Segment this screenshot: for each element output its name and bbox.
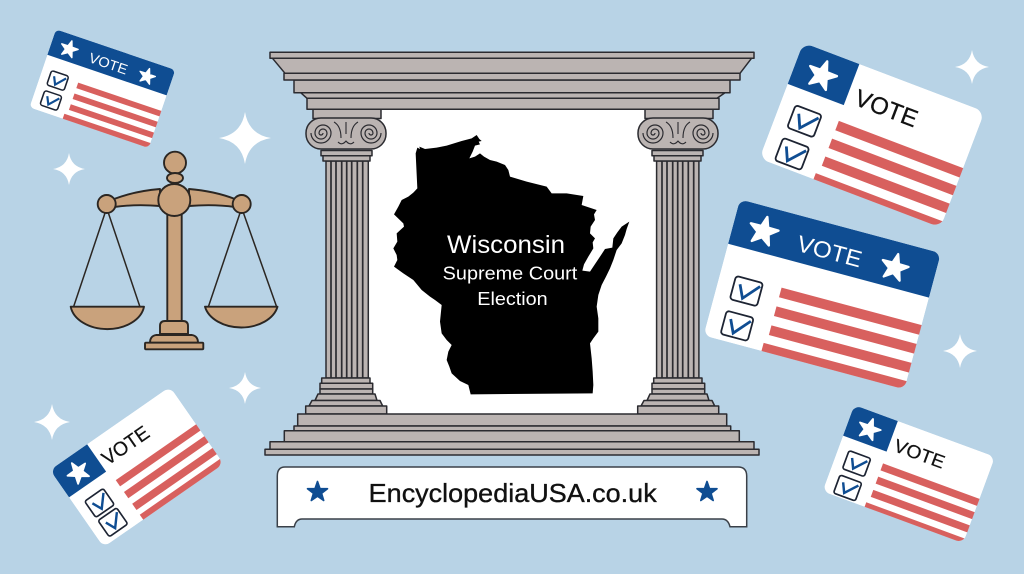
sparkle: middle right [943, 334, 977, 368]
ballot card: top left [29, 29, 178, 150]
icon: banner star left [308, 482, 327, 500]
ballot card: top right: VOTE [851, 85, 921, 133]
column: right [638, 118, 719, 414]
sparkle: lower left centre [229, 372, 261, 404]
column: left [306, 118, 387, 414]
courthouse base steps [265, 414, 759, 455]
ballot card: bottom left [53, 390, 221, 544]
ballot card: middle right [703, 199, 946, 392]
banner: website name [277, 467, 747, 527]
map: Wisconsin silhouette [393, 135, 629, 394]
ballot card: top right [762, 46, 982, 225]
sparkle: top right [955, 50, 989, 84]
icon: scales of justice [71, 152, 278, 349]
sparkle: upper left large [219, 112, 271, 164]
sparkle: lower left [34, 404, 70, 440]
map label: Supreme Court [443, 263, 577, 283]
ballot card: bottom right [824, 407, 993, 541]
icon: banner star right [697, 482, 717, 500]
map label: Wisconsin [447, 231, 565, 259]
ballot card: bottom left: VOTE [98, 422, 154, 470]
ballot card: top left: VOTE [87, 51, 129, 78]
ballot card: middle right: VOTE [794, 230, 865, 272]
banner text: EncyclopediaUSA.co.uk [369, 478, 658, 508]
map label [443, 231, 577, 309]
map label: Election [477, 289, 548, 309]
ballot card: bottom right: VOTE [891, 436, 947, 473]
panel: courthouse white backdrop [360, 105, 670, 417]
courthouse entablature [270, 52, 754, 118]
sparkle: upper left small [53, 153, 85, 185]
